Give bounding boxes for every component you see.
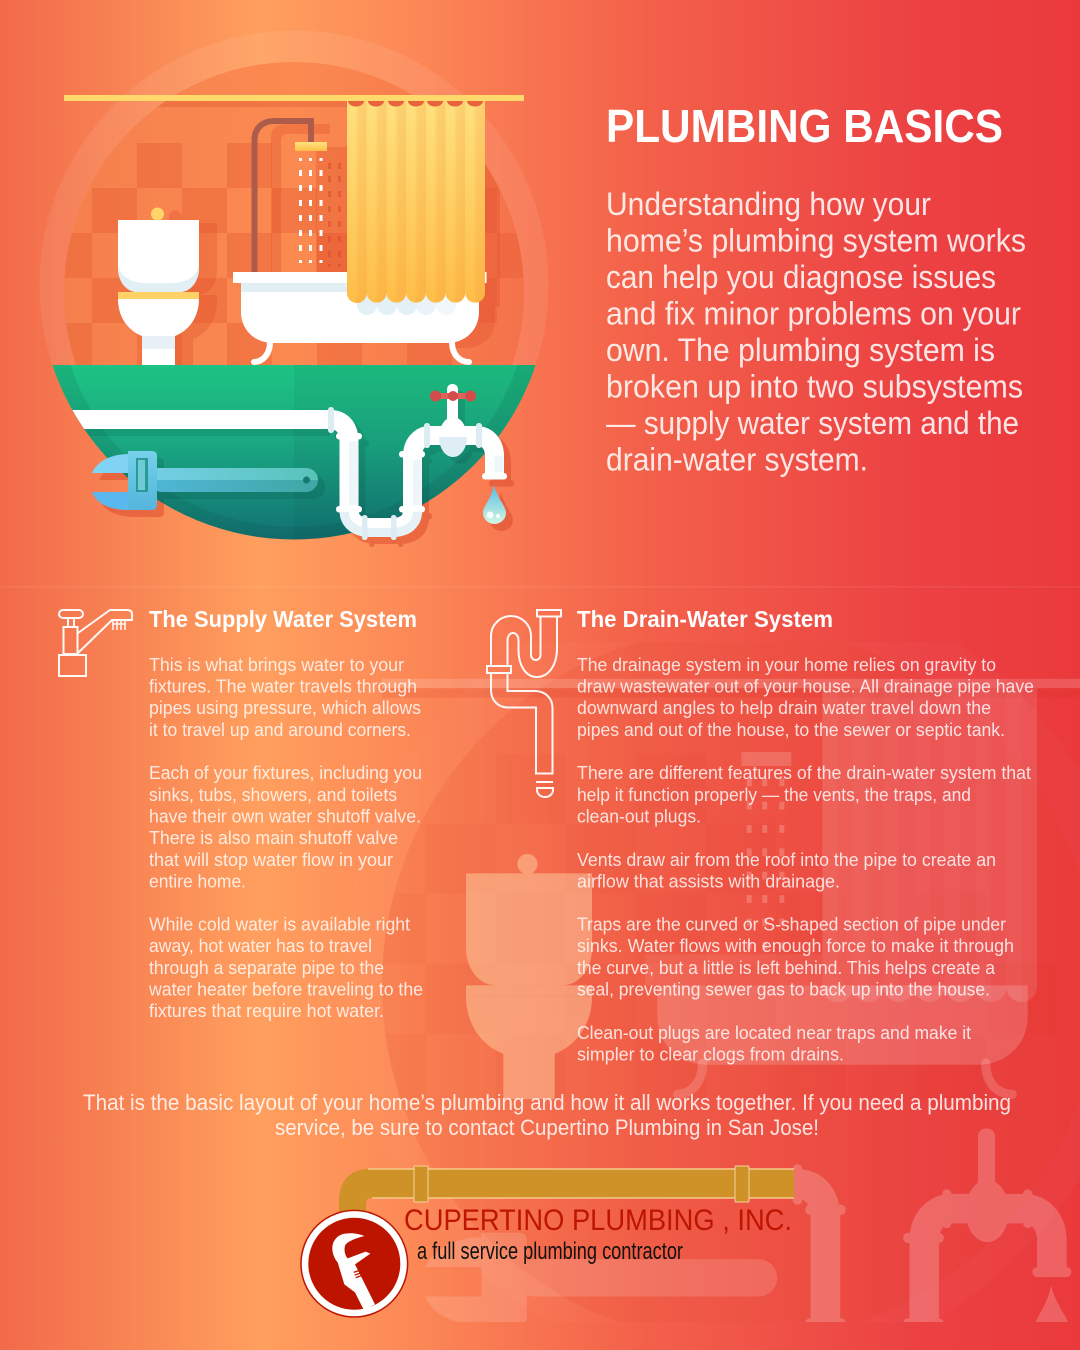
text block: drain-water system: downward angles to help drain water travel down the	[577, 697, 991, 718]
text block: drain-water system: the curve, but a little is left behind. This helps create a	[577, 957, 996, 978]
white supply pipe	[72, 410, 328, 429]
text block: drain-water system	[577, 654, 1034, 1064]
text block: drain-water system: simpler to clear clogs from drains.	[577, 1044, 844, 1064]
text block: supply water system: it to travel up and around corners.	[149, 719, 411, 740]
intro paragraph: own. The plumbing system is	[606, 332, 995, 368]
shower curtain	[347, 101, 485, 303]
text block: drain-water system: airflow that assists with drainage.	[577, 870, 840, 892]
intro paragraph: — supply water system and the	[606, 405, 1019, 441]
heading: supply water system: The Supply Water System	[149, 606, 417, 632]
text block: drain-water system: Vents draw air from the roof into the pipe to create an	[577, 849, 996, 870]
faucet red handle	[430, 390, 476, 402]
text block: drain-water system: pipes and out of the house, to the sewer or septic tank.	[577, 719, 1005, 740]
text block: supply water system: that will stop water flow in your	[149, 849, 393, 870]
water drop	[483, 485, 506, 524]
closing text	[83, 1090, 1011, 1140]
bathtub	[233, 272, 486, 362]
logo: tagline: a full service plumbing contractor	[417, 1238, 683, 1265]
text block: supply water system: entire home.	[149, 870, 246, 892]
text block: supply water system: This is what brings water to your	[149, 654, 404, 675]
text block: supply water system: away, hot water has to travel	[149, 935, 372, 956]
text block: drain-water system: There are different features of the drain-water system that	[577, 762, 1032, 783]
icon: drain trap	[487, 610, 561, 797]
text block: drain-water system: clean-out plugs.	[577, 806, 701, 826]
text block: supply water system	[148, 654, 423, 1021]
intro paragraph: drain-water system.	[606, 442, 868, 478]
text block: drain-water system: Clean-out plugs are located near traps and make it	[577, 1022, 972, 1043]
text block: supply water system: There is also main shutoff valve	[149, 827, 398, 848]
wrench	[92, 451, 318, 510]
text block: drain-water system: The drainage system in your home relies on gravity to	[577, 654, 996, 675]
intro paragraph: can help you diagnose issues	[606, 259, 996, 295]
text block: supply water system: pipes using pressure, which allows	[149, 697, 421, 718]
drain pipes and faucet	[328, 384, 507, 540]
heading: drain-water system: The Drain-Water System	[577, 606, 833, 632]
ring behind the scene	[40, 30, 548, 365]
title: PLUMBING BASICS	[606, 100, 1003, 152]
shadows cast outside the floor circle	[99, 391, 514, 547]
text block: supply water system: through a separate pipe to the	[149, 957, 384, 978]
text block: supply water system: fixtures. The water travels through	[149, 676, 417, 696]
shower	[254, 121, 341, 272]
curtain rod	[64, 95, 524, 101]
floor section	[52, 365, 536, 540]
intro paragraph: Understanding how your	[606, 186, 931, 222]
wall shadows	[158, 101, 500, 365]
shadows on the floor	[122, 391, 484, 533]
text block: supply water system: have their own water shutoff valve.	[149, 806, 421, 826]
logo: gold pipe	[339, 1166, 794, 1215]
intro paragraph: home’s plumbing system works	[606, 222, 1026, 258]
icon: faucet	[59, 610, 132, 676]
text block: drain-water system: draw wastewater out of your house. All drainage pipe have	[577, 676, 1034, 696]
tiled wall	[47, 60, 542, 370]
watermark illustration	[382, 678, 1080, 1322]
text block: supply water system: sinks, tubs, showers, and toilets	[149, 784, 397, 805]
intro paragraph: and fix minor problems on your	[606, 296, 1021, 332]
text block: supply water system: Each of your fixtures, including you	[149, 762, 422, 783]
text block: supply water system: While cold water is available right	[149, 914, 411, 934]
intro paragraph	[606, 186, 1026, 478]
closing text: service, be sure to contact Cupertino Plumbing in San Jose!	[275, 1115, 819, 1140]
text block: drain-water system: help it function properly — the vents, the traps, and	[577, 784, 971, 805]
closing text: That is the basic layout of your home’s plumbing and how it all works together. If you need a plumbing	[83, 1090, 1011, 1115]
intro paragraph: broken up into two subsystems	[606, 368, 1023, 404]
text block: drain-water system: sinks. Water flows with enough force to make it through	[577, 935, 1014, 956]
toilet	[118, 208, 199, 365]
text block: supply water system: fixtures that require hot water.	[149, 1000, 384, 1021]
logo: company name: CUPERTINO PLUMBING , INC.	[404, 1204, 792, 1237]
text block: supply water system: water heater before traveling to the	[148, 978, 423, 1000]
main bathroom illustration	[30, 30, 560, 547]
text block: drain-water system: Traps are the curved or S-shaped section of pipe under	[577, 914, 1006, 934]
text block: drain-water system: seal, preventing sewer gas to back up into the house.	[577, 978, 990, 1000]
logo: emblem	[301, 1210, 408, 1317]
